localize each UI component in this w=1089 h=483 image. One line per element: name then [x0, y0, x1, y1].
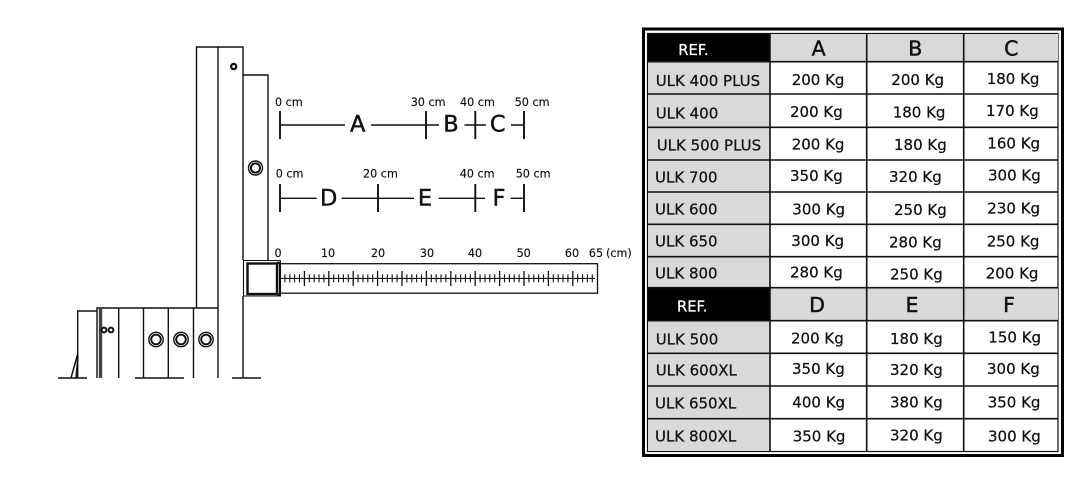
row ULK 700: ULK 700 — [655, 169, 718, 187]
ruler arm with cm graduations: 10 — [321, 247, 335, 260]
header D E F: F — [1003, 293, 1015, 317]
rear column — [243, 75, 268, 260]
header D E F — [677, 293, 1015, 317]
dimension scale D E F: E — [418, 186, 432, 212]
row ULK 600: 250 Kg — [894, 201, 947, 219]
row ULK 650XL: 380 Kg — [890, 394, 943, 412]
small twin pins — [102, 328, 113, 332]
row ULK 700: 350 Kg — [790, 167, 843, 185]
ruler arm with cm graduations: 50 — [517, 247, 531, 260]
side view diagram of machine — [58, 47, 280, 378]
row ULK 500 — [656, 329, 1041, 348]
row ULK 400: 180 Kg — [893, 104, 945, 122]
row ULK 800XL: 320 Kg — [890, 427, 943, 445]
row ULK 500: ULK 500 — [656, 330, 718, 348]
row ULK 800XL — [655, 427, 1041, 445]
row ULK 800XL: 350 Kg — [793, 427, 845, 445]
dimension scale A B C: 0 cm — [275, 96, 303, 109]
row ULK 800: ULK 800 — [655, 264, 718, 282]
header D E F: E — [906, 293, 918, 317]
row ULK 800 — [655, 264, 1038, 284]
row ULK 400: 170 Kg — [986, 102, 1039, 120]
row ULK 400 PLUS: 200 Kg — [891, 71, 944, 89]
column bolt — [248, 161, 262, 175]
row ULK 500 PLUS: 160 Kg — [987, 135, 1040, 153]
row ULK 700: 320 Kg — [889, 168, 942, 186]
row ULK 400 PLUS: 180 Kg — [987, 70, 1039, 88]
row ULK 700 — [655, 166, 1041, 187]
ruler arm with cm graduations: (cm) — [606, 247, 632, 260]
ruler body — [280, 264, 598, 293]
ruler arm with cm graduations: 65 — [589, 247, 603, 260]
thick edge of base — [99, 308, 102, 378]
row ULK 650 — [655, 232, 1039, 252]
row ULK 600XL: ULK 600XL — [656, 362, 738, 380]
load capacity table — [644, 29, 1062, 456]
row ULK 500 PLUS: 180 Kg — [894, 136, 947, 154]
dimension scale A B C: 30 cm — [411, 96, 446, 109]
header A B C: A — [812, 36, 826, 60]
foot brace — [71, 354, 78, 378]
row ULK 600: 300 Kg — [792, 200, 845, 218]
header A B C — [678, 36, 1018, 60]
table shading — [648, 34, 1058, 451]
base bolts — [149, 332, 213, 347]
row ULK 650: 280 Kg — [889, 234, 942, 252]
row ULK 650XL: 350 Kg — [988, 393, 1040, 411]
dimension scale D E F: 40 cm — [460, 167, 495, 180]
row ULK 600XL: 350 Kg — [792, 360, 845, 378]
dimension scale D E F: D — [320, 186, 337, 212]
header A B C: REF. — [678, 42, 709, 59]
dimension scale A B C: 50 cm — [515, 96, 550, 109]
row ULK 650: 250 Kg — [987, 233, 1039, 251]
dimension scale D E F — [276, 167, 551, 212]
row ULK 400: 200 Kg — [790, 103, 843, 121]
ruler arm with cm graduations: 40 — [468, 247, 482, 260]
row ULK 500 PLUS: 200 Kg — [792, 135, 844, 153]
header D E F: D — [809, 293, 825, 317]
row ULK 650XL: 400 Kg — [792, 393, 845, 411]
row ULK 800XL: ULK 800XL — [655, 427, 737, 445]
dimension scale D E F: 0 cm — [276, 167, 303, 180]
ruler arm with cm graduations: 20 — [371, 247, 385, 260]
ruler arm with cm graduations: 0 — [274, 247, 282, 260]
dimension scale A B C: C — [490, 112, 506, 138]
row ULK 500: 200 Kg — [791, 329, 844, 347]
base frame — [78, 308, 218, 378]
row ULK 500: 150 Kg — [988, 329, 1041, 347]
dimension scale A B C: A — [350, 112, 366, 138]
row ULK 500 PLUS: ULK 500 PLUS — [657, 137, 761, 155]
top pin — [231, 64, 236, 69]
header A B C: C — [1004, 36, 1018, 60]
header A B C: B — [908, 36, 922, 60]
dimension scale D E F: 20 cm — [363, 167, 398, 180]
row ULK 600XL: 320 Kg — [890, 361, 943, 379]
header D E F: REF. — [677, 299, 707, 316]
row ULK 800XL: 300 Kg — [988, 427, 1041, 445]
ruler arm with cm graduations: 30 — [420, 247, 434, 260]
row ULK 650XL: ULK 650XL — [655, 394, 737, 412]
row ULK 500 PLUS — [657, 135, 1040, 155]
row ULK 700: 300 Kg — [988, 166, 1041, 184]
row ULK 400 PLUS: ULK 400 PLUS — [656, 72, 760, 90]
row ULK 650: 300 Kg — [791, 232, 844, 250]
dimension scale D E F: 50 cm — [516, 167, 551, 180]
dimension scale A B C: 40 cm — [460, 96, 495, 109]
row ULK 800: 280 Kg — [790, 264, 843, 282]
row ULK 600 — [655, 200, 1040, 219]
row ULK 800: 200 Kg — [986, 264, 1038, 282]
row ULK 400 PLUS: 200 Kg — [792, 71, 844, 89]
row ULK 600XL: 300 Kg — [987, 360, 1040, 378]
row ULK 400 — [656, 102, 1039, 122]
table grid — [648, 34, 1058, 452]
row ULK 600: 230 Kg — [987, 200, 1040, 218]
row ULK 400 PLUS — [656, 70, 1039, 90]
row ULK 650: ULK 650 — [655, 233, 718, 251]
row ULK 500: 180 Kg — [890, 330, 943, 348]
row ULK 800: 250 Kg — [890, 266, 943, 284]
row ULK 650XL — [655, 393, 1040, 412]
row ULK 600XL — [656, 360, 1040, 380]
row ULK 400: ULK 400 — [656, 104, 718, 122]
ruler arm with cm graduations: 60 — [565, 247, 579, 260]
row ULK 600: ULK 600 — [655, 200, 718, 218]
table frame — [644, 29, 1062, 456]
dimension scale A B C — [275, 96, 550, 139]
dimension scale D E F: F — [493, 186, 505, 212]
ruler arm with cm graduations — [274, 247, 632, 293]
ground lines — [58, 377, 261, 379]
tall column — [196, 47, 243, 378]
dimension scale A B C: B — [443, 112, 459, 138]
arm socket — [244, 260, 280, 296]
